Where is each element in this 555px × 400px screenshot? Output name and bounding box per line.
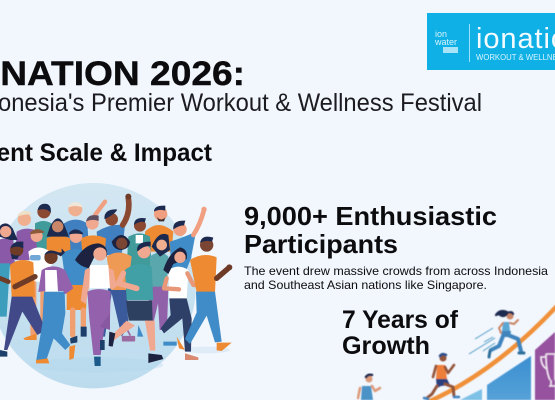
runner: orange shirt far right: [177, 237, 232, 351]
front row: [0, 237, 232, 366]
heading: growth: 7 Years of: [342, 306, 459, 334]
bar: medium: [487, 356, 531, 400]
runner: purple jacket: [36, 248, 75, 363]
body text: and Southeast Asian nations like Singapore.: [244, 278, 487, 292]
runner: white shirt woman: [161, 247, 202, 360]
bar: tall with trophy: [535, 332, 555, 400]
runner: central woman: [75, 243, 117, 366]
body text: [244, 264, 548, 292]
illustration: crowd of runners: [0, 183, 232, 388]
trend line: [428, 306, 555, 400]
body text: The event drew massive crowds from across Indonesia: [244, 264, 548, 278]
heading: participants line two: Participants: [244, 229, 398, 259]
icon: runner man blue: [358, 375, 380, 400]
icon: trophy: [541, 354, 555, 386]
logo banner: [427, 13, 555, 70]
middle row: [0, 215, 177, 346]
bar: small: [460, 389, 482, 400]
runner: orange shirt far left: [0, 241, 46, 357]
heading: growth: Growth: [342, 332, 430, 360]
growth chart: bars, trend line, trophy: [428, 306, 555, 400]
heading: growth: [342, 306, 459, 360]
logo banner: ion: [435, 29, 447, 39]
logo banner: water: [434, 37, 457, 47]
icon: runner woman: [489, 311, 524, 357]
icon: speed lines: [469, 328, 495, 354]
heading: participants: 9,000+ Enthusiastic: [244, 201, 497, 231]
back row: [15, 194, 207, 275]
icon: runner man orange: [424, 354, 459, 399]
runner: teal shirt: [109, 242, 163, 363]
